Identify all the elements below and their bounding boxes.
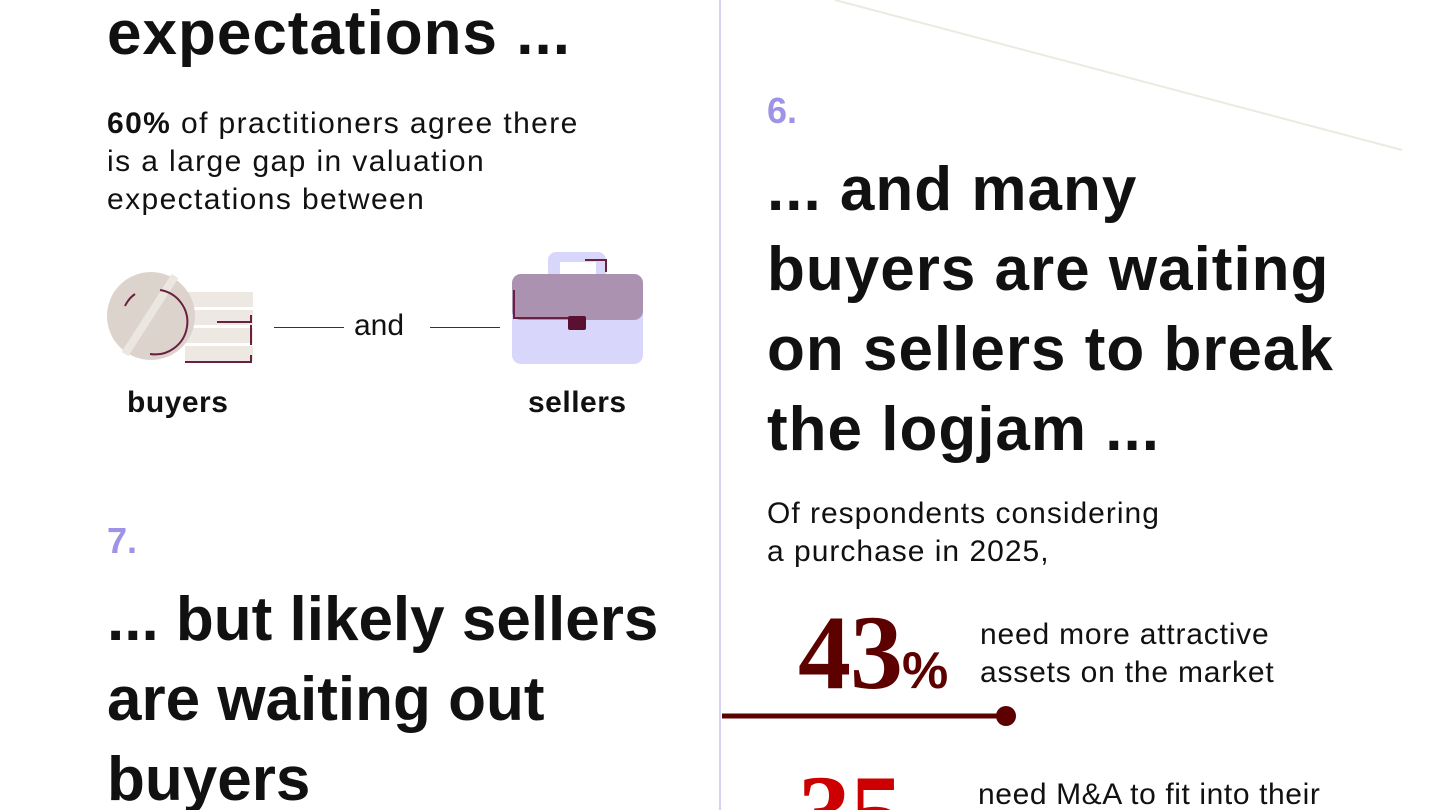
stat: 43%: assets on the market (980, 656, 1274, 689)
number 7: 7. (107, 520, 137, 561)
text block: 60%: 60% of practitioners agree there (107, 107, 579, 140)
stat: 35% (798, 760, 1320, 810)
heading: buyers waiting (767, 155, 1334, 464)
heading: sellers waiting: are waiting out (107, 665, 544, 734)
number 6: 6. (767, 90, 797, 131)
stat: 43% (722, 594, 1274, 726)
text block: respondents (767, 497, 1160, 568)
text block: 60% (107, 107, 579, 216)
label: buyers: buyers (127, 386, 228, 419)
connector: and: and (354, 309, 404, 342)
label: sellers: sellers (528, 386, 627, 419)
text block: 60%: is a large gap in valuation (107, 145, 485, 178)
heading: buyers waiting: buyers are waiting (767, 235, 1329, 304)
heading: buyers waiting: ... and many (767, 155, 1137, 224)
heading: sellers waiting (107, 585, 658, 810)
text block: respondents: Of respondents considering (767, 497, 1160, 530)
icon: briefcase (sellers) (512, 252, 643, 364)
text block: 60%: expectations between (107, 183, 425, 216)
heading: buyers waiting: on sellers to break (767, 315, 1334, 384)
text block: respondents: a purchase in 2025, (767, 535, 1050, 568)
heading: buyers waiting: the logjam ... (767, 395, 1160, 464)
stat: 43%: need more attractive (980, 618, 1269, 651)
heading: expectations: expectations ... (107, 0, 571, 68)
stat: 43%: 43% (798, 594, 948, 711)
heading: sellers waiting: ... but likely sellers (107, 585, 658, 654)
icon: coins (buyers) (107, 272, 253, 363)
